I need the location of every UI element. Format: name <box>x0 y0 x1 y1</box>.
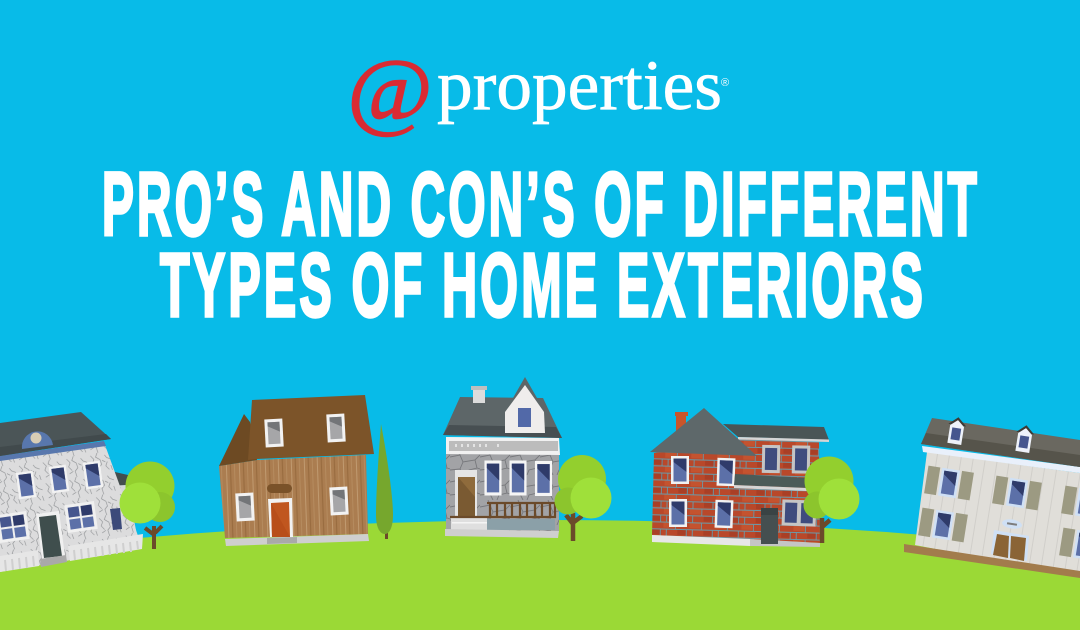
tree: cypress <box>376 424 393 539</box>
railing <box>450 503 556 518</box>
wall <box>0 445 142 572</box>
front step <box>40 555 67 567</box>
base <box>904 544 1080 578</box>
green hill <box>0 520 1080 630</box>
wing window <box>110 508 122 530</box>
roof <box>0 412 111 456</box>
gable <box>219 414 257 466</box>
upper white wall <box>446 437 560 455</box>
main roof <box>650 408 757 456</box>
door sign <box>267 484 292 493</box>
upper windows with shutters <box>924 466 974 500</box>
windows <box>671 456 689 484</box>
foundation <box>652 535 750 546</box>
eave <box>922 446 1080 473</box>
logo at sign: @ <box>347 43 432 140</box>
dormers <box>945 416 967 445</box>
windows <box>484 460 502 496</box>
door <box>761 508 778 544</box>
logo: @properties <box>347 43 729 140</box>
house: brick <box>650 408 829 547</box>
roof <box>248 395 374 460</box>
roof <box>921 418 1080 467</box>
door <box>268 498 293 537</box>
chimney <box>676 415 686 431</box>
door <box>455 470 477 518</box>
windows upper <box>16 471 36 499</box>
back roof <box>723 424 829 440</box>
registered mark: ® <box>721 77 729 89</box>
lower windows with shutters <box>918 508 968 542</box>
porch roof <box>734 474 807 488</box>
windows <box>264 419 284 447</box>
door <box>36 511 65 559</box>
lower right window <box>782 499 816 527</box>
wing wall <box>104 485 137 540</box>
fascia <box>0 441 106 461</box>
brick wall <box>652 438 820 543</box>
logo wordmark: properties <box>437 47 722 125</box>
dormer <box>505 377 545 412</box>
roof <box>443 397 562 438</box>
dormer <box>22 431 53 449</box>
tree: right <box>804 456 860 543</box>
stone wall <box>446 454 559 532</box>
door <box>991 530 1029 561</box>
steps <box>451 518 487 530</box>
tree: center <box>554 455 612 541</box>
wall <box>219 455 368 538</box>
tree: left <box>120 462 175 549</box>
four pane window left <box>0 511 30 543</box>
wing roof <box>102 469 128 487</box>
four pane window right <box>64 501 98 533</box>
foundation <box>445 529 559 538</box>
step <box>267 537 297 544</box>
wall <box>915 452 1080 577</box>
porch rails <box>68 534 143 561</box>
house: white siding <box>904 416 1080 578</box>
chimney <box>473 389 485 403</box>
house: left stone stucco <box>0 412 143 572</box>
upper right windows <box>762 445 780 473</box>
porch deck <box>487 519 555 530</box>
house: wood siding <box>219 395 374 546</box>
foundation <box>225 534 369 546</box>
door sign <box>1001 518 1023 530</box>
title <box>102 155 980 336</box>
house: stone <box>443 377 562 538</box>
